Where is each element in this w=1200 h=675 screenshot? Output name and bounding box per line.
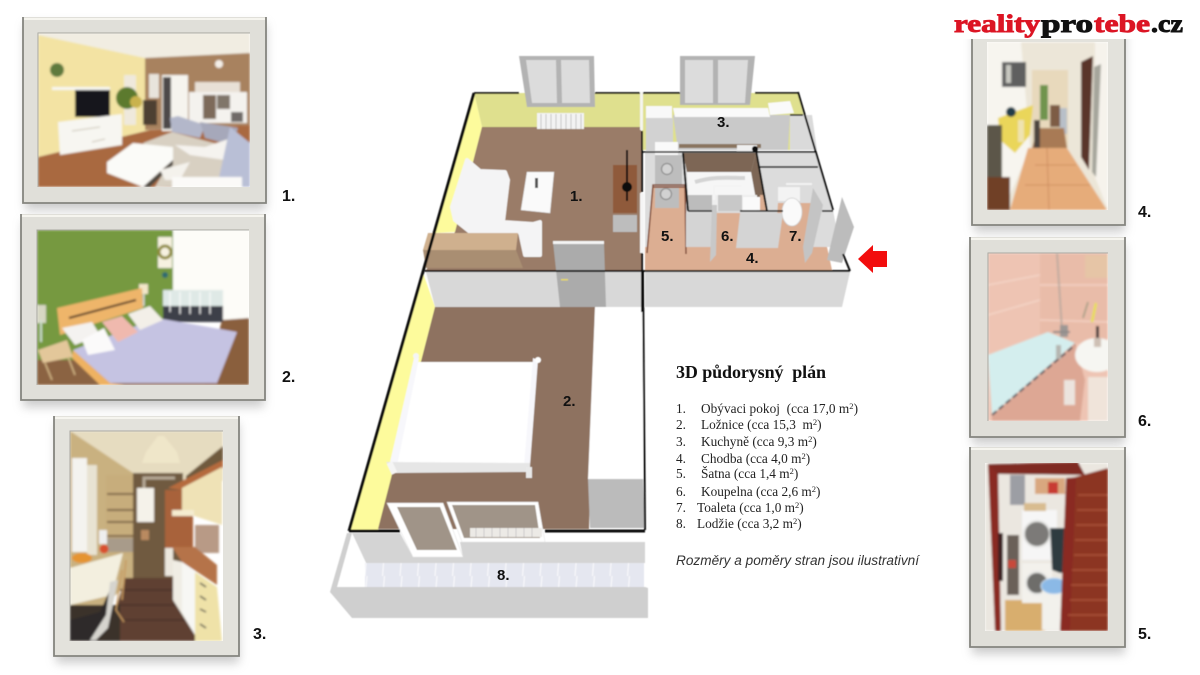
legend list bbox=[676, 401, 858, 531]
legend list: 5. bbox=[676, 466, 686, 481]
TV unit bbox=[613, 150, 637, 232]
photo frame 1: living room bbox=[23, 17, 266, 210]
door: living room to bedroom bbox=[553, 241, 606, 307]
legend list: ) bbox=[812, 434, 817, 449]
wardrobe frame bbox=[647, 185, 686, 254]
legend list: 8. bbox=[676, 516, 686, 531]
legend list: ) bbox=[854, 401, 858, 416]
photo: closet interior bbox=[985, 462, 1108, 631]
legend list: Kuchyně (cca 9,3 m bbox=[701, 434, 808, 449]
logo: pro bbox=[1041, 11, 1093, 38]
room labels on plan: 5. bbox=[661, 228, 674, 245]
legend list: ) bbox=[817, 417, 822, 432]
logo: tebe bbox=[1094, 11, 1150, 38]
legend list: Lodžie (cca 3,2 m bbox=[697, 516, 793, 531]
legend list: 2 bbox=[795, 500, 799, 510]
legend list: 6. bbox=[676, 484, 686, 499]
room labels on plan: 6. bbox=[721, 228, 734, 245]
window: living room bbox=[519, 56, 595, 107]
logo: .cz bbox=[1151, 11, 1183, 38]
legend list: 2. bbox=[676, 417, 686, 432]
legend list: ) bbox=[797, 516, 802, 531]
label: photo 6: 6. bbox=[1138, 413, 1151, 430]
arrow: entrance bbox=[858, 245, 887, 273]
photo frame 5: closet bbox=[970, 447, 1125, 654]
label: photo 1: 1. bbox=[282, 188, 295, 205]
inner walls bbox=[686, 213, 712, 247]
legend list: Koupelna (cca 2,6 m bbox=[701, 484, 812, 499]
photo: bedroom interior bbox=[37, 230, 249, 385]
room labels on plan: 7. bbox=[789, 228, 802, 245]
room labels on plan: 1. bbox=[570, 188, 583, 205]
logo bbox=[950, 0, 1200, 39]
room 3: kitchen bbox=[642, 56, 817, 151]
walls below living room bbox=[426, 272, 643, 307]
legend list: 2 bbox=[849, 401, 854, 411]
service rooms walls bbox=[645, 152, 840, 247]
balcony door bbox=[387, 503, 463, 557]
legend list: 2 bbox=[813, 417, 817, 427]
black wall lines bbox=[349, 92, 850, 531]
legend list: Chodba (cca 4,0 m bbox=[701, 451, 801, 466]
room labels on plan: 2. bbox=[563, 393, 576, 410]
room labels on plan: 3. bbox=[717, 114, 730, 131]
legend list: 7. bbox=[676, 500, 686, 515]
loggia bbox=[330, 533, 648, 618]
door: toilet bbox=[803, 188, 823, 263]
legend list: 2 bbox=[793, 516, 797, 526]
logo: reality bbox=[954, 11, 1041, 38]
room labels on plan bbox=[497, 114, 802, 584]
legend list: 4. bbox=[676, 451, 686, 466]
3D floor plan bbox=[330, 56, 854, 618]
sofa bbox=[452, 160, 540, 255]
title: 3D půdorysný plán bbox=[676, 362, 826, 382]
photo: living room interior bbox=[38, 33, 250, 187]
room labels on plan: 4. bbox=[746, 250, 759, 267]
toilet bbox=[778, 183, 812, 226]
legend list: ) bbox=[816, 484, 820, 499]
photo: bathroom interior bbox=[988, 253, 1119, 421]
room labels on plan: 8. bbox=[497, 567, 510, 584]
window: kitchen bbox=[680, 56, 755, 105]
coffee table bbox=[521, 172, 554, 213]
legend list: Obývaci pokoj (cca 17,0 m bbox=[701, 401, 849, 416]
legend list: 3. bbox=[676, 434, 686, 449]
sideboard bbox=[423, 233, 523, 268]
label: photo 3: 3. bbox=[253, 626, 266, 643]
balcony window bbox=[447, 502, 545, 542]
legend list: 2 bbox=[790, 466, 794, 476]
photo frame 2: bedroom bbox=[21, 214, 265, 407]
legend list: Toaleta (cca 1,0 m bbox=[697, 500, 795, 515]
legend list: ) bbox=[806, 451, 810, 466]
label: photo 2: 2. bbox=[282, 369, 295, 386]
legend list: ) bbox=[794, 466, 798, 481]
legend list: Šatna (cca 1,4 m bbox=[701, 466, 790, 481]
washing machines bbox=[655, 142, 682, 208]
photo frame 6: bathroom bbox=[970, 237, 1125, 444]
label: photo 4: 4. bbox=[1138, 204, 1151, 221]
photo frame 3: kitchen bbox=[54, 416, 239, 663]
legend list: ) bbox=[799, 500, 804, 515]
entrance door bbox=[827, 197, 854, 263]
legend list: Ložnice (cca 15,3 m bbox=[701, 417, 813, 432]
note: Rozměry a poměry stran jsou ilustrativní bbox=[676, 553, 920, 568]
photo frame 4: hallway bbox=[972, 28, 1125, 232]
legend list: 1. bbox=[676, 401, 686, 416]
label: photo 5: 5. bbox=[1138, 626, 1151, 643]
room 2: bedroom bbox=[350, 273, 645, 530]
legend list: 2 bbox=[812, 484, 816, 494]
room 1: living room bbox=[423, 56, 642, 270]
legend list: 2 bbox=[801, 451, 806, 461]
photo: kitchen interior bbox=[70, 431, 223, 641]
photo: hallway interior bbox=[987, 42, 1108, 210]
room 6: bathroom back walls and tub bbox=[683, 153, 767, 211]
radiator bbox=[537, 113, 584, 129]
door: bathroom bbox=[710, 205, 717, 262]
legend list: 2 bbox=[808, 434, 812, 444]
hall floor and room floors bbox=[645, 187, 832, 270]
bed bbox=[386, 353, 541, 478]
